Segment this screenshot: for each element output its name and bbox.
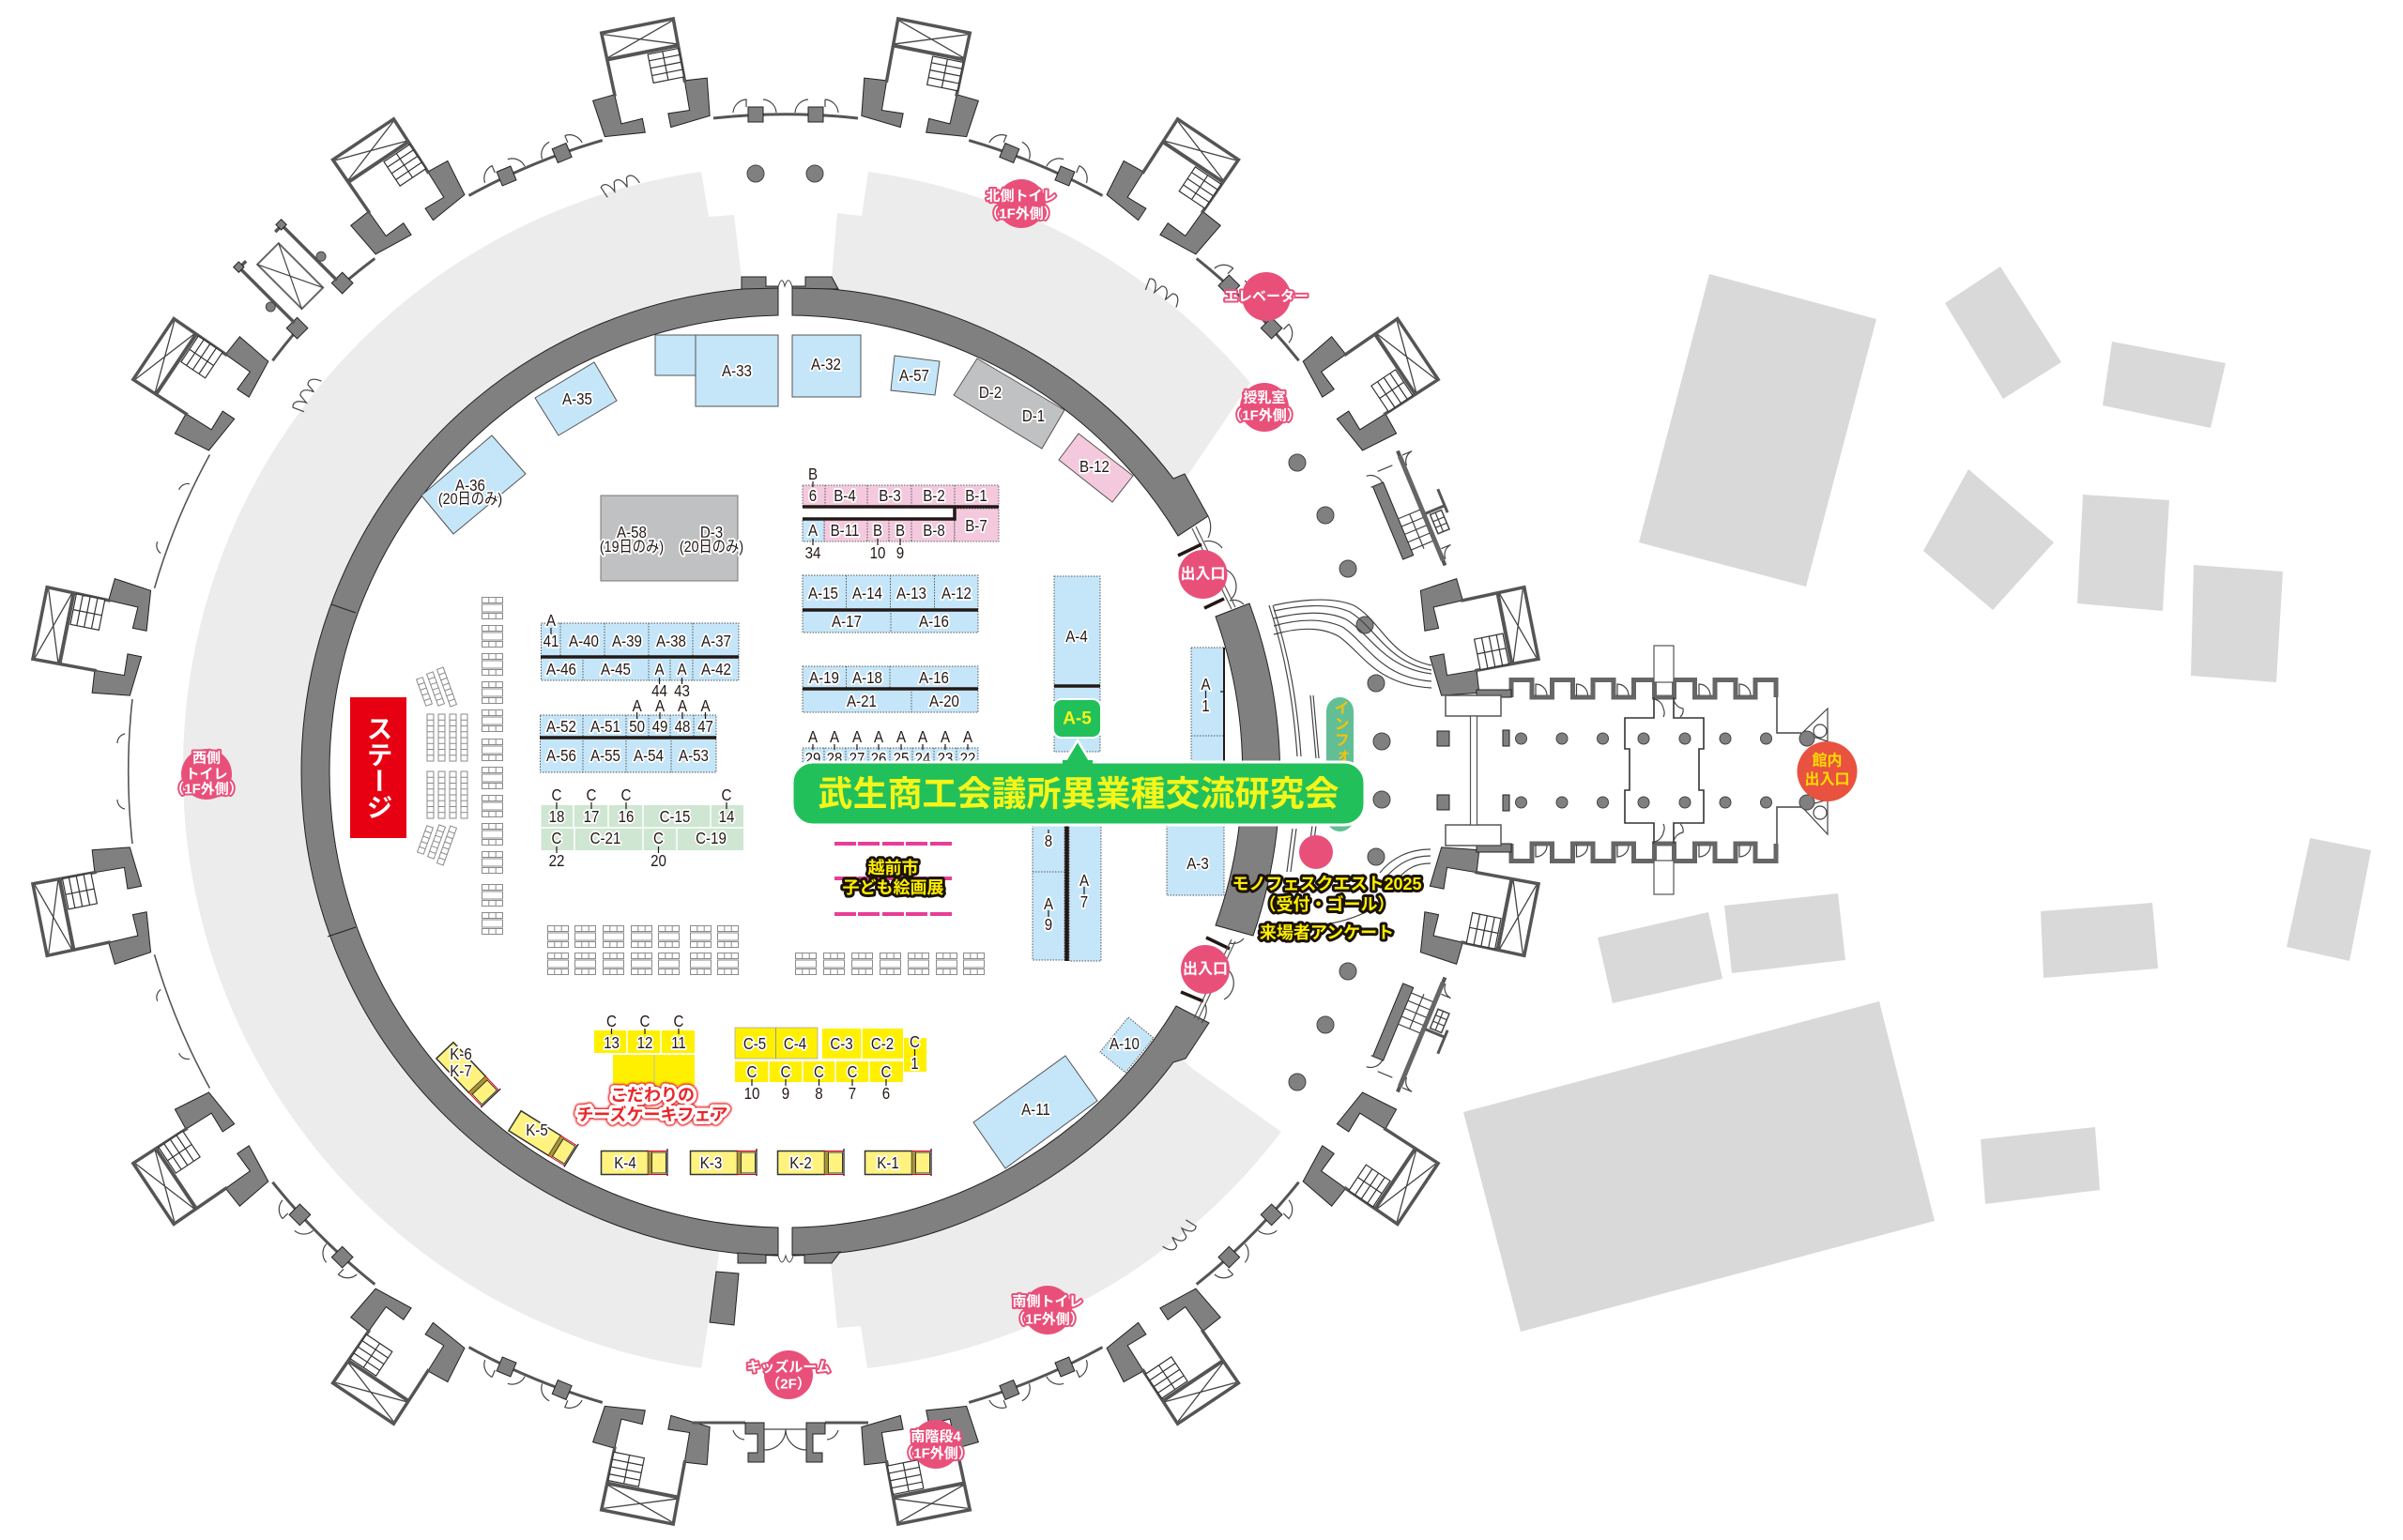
booths A-1 A-3: 1 (1202, 696, 1210, 715)
badge: 西側トイレ: トイレ (185, 766, 228, 783)
booths C-14 to C-22: 17 (584, 807, 599, 826)
badge: 南階段4: 南階段4 (911, 1428, 961, 1445)
booths A-7 A-8 A-9: 7 (1080, 892, 1088, 911)
booths A-22 to A-29: A (852, 727, 863, 746)
booths B row: A (808, 521, 819, 540)
booths A-22 to A-29: A (874, 727, 884, 746)
booths B row: 9 (896, 543, 904, 562)
badge: 館内出入口 (1797, 741, 1857, 801)
booths A-12 to A-17: A-16 (919, 612, 949, 631)
booths A-7 A-8 A-9: 9 (1045, 915, 1052, 934)
badge: 出入口 north: 出入口 (1180, 565, 1226, 582)
booths C-14 to C-22: C-19 (696, 829, 727, 847)
booths C-1 to C-10: C-5 (743, 1034, 766, 1053)
perimeter stair towers (28, 14, 1543, 1529)
booths A-16 to A-21 (803, 666, 978, 712)
booths A-37 to A-46: 43 (674, 681, 690, 700)
booths C-1 to C-10: C-2 (871, 1034, 894, 1053)
booths C-1 to C-10: C (814, 1062, 824, 1081)
west lift box (207, 192, 376, 362)
audience chairs (417, 667, 467, 865)
こだわりのチーズケーキフェア label (576, 1086, 728, 1124)
perimeter booths north: B-12 (1079, 457, 1110, 476)
booths C-14 to C-22: 18 (549, 807, 564, 826)
badge: 南側トイレ (1011, 1286, 1084, 1334)
booths C-14 to C-22: C (653, 829, 664, 847)
booth A-4: A-4 (1065, 627, 1088, 646)
kitchen cars K-1 to K-7: K-3 (700, 1153, 722, 1172)
badge: キッズルーム: キッズルーム (746, 1359, 831, 1376)
booth A-58 D-3: D-3 (700, 523, 723, 541)
booths A-22 to A-29: 26 (871, 749, 886, 768)
booths A-12 to A-17: A-12 (941, 584, 972, 602)
booths A-37 to A-46: A-37 (701, 632, 731, 650)
booths A-47 to A-56 (540, 696, 716, 772)
booths C-1 to C-10: C-4 (784, 1034, 806, 1053)
booths C-14 to C-22: 14 (719, 807, 734, 826)
badge: キッズルーム: （2F） (766, 1376, 811, 1393)
perimeter wall segments with doors (117, 99, 1312, 1420)
curved entrance steps (1269, 600, 1431, 926)
booths C-1 to C-10: C (848, 1062, 857, 1081)
booths C-14 to C-22: C-15 (660, 807, 690, 826)
exhibition pink poles (834, 842, 952, 916)
door markers in the concourse (290, 174, 1199, 1254)
south doors (692, 1423, 868, 1462)
booths A-22 to A-29: 29 (805, 749, 820, 768)
badge: 西側トイレ: 西側 (192, 751, 221, 766)
booths B row: B-2 (923, 486, 945, 505)
perimeter booths north: D-2 (979, 383, 1002, 402)
booths A-47 to A-56: A (655, 696, 666, 715)
booths A-37 to A-46: A-46 (546, 660, 576, 679)
kitchen cars K-1 to K-7: K-1 (877, 1153, 899, 1172)
booth A-4 (1054, 576, 1100, 752)
booths C-14 to C-22: 20 (650, 851, 666, 870)
booths A-37 to A-46: A-40 (569, 632, 599, 650)
badge: 授乳室 (1228, 383, 1301, 432)
booths B row: B-1 (965, 486, 987, 505)
booths A-37 to A-46 (541, 611, 739, 700)
booth A-58 D-3 (600, 496, 743, 581)
kitchen cars K-1 to K-7 (436, 1041, 931, 1176)
booths C-1 to C-10: C (910, 1032, 920, 1051)
booths A-22 to A-29: 23 (938, 749, 953, 768)
booths B row: B-7 (965, 516, 987, 535)
booths C-1 to C-10: C (747, 1062, 757, 1081)
booths C-14 to C-22: 22 (549, 851, 564, 870)
booths A-47 to A-56: 49 (652, 717, 667, 736)
badge: 南階段4 (899, 1420, 972, 1469)
badge: A-5: A-5 (1063, 709, 1092, 728)
badge: 授乳室: （1F外側） (1228, 407, 1301, 424)
kitchen cars K-1 to K-7: K-4 (614, 1153, 636, 1172)
perimeter booths north: A-35 (562, 389, 592, 408)
booths B row: B-11 (831, 521, 859, 540)
booths B row: B-4 (834, 486, 856, 505)
booths A-22 to A-29: 27 (849, 749, 865, 768)
perimeter booths north: A-36 (455, 476, 485, 495)
entrance hall (1437, 646, 1828, 894)
booths A-37 to A-46: A-42 (701, 660, 731, 679)
callout: 武生商工会議所異業種交流研究会 with pointer (792, 740, 1365, 825)
booths C-14 to C-22: 16 (619, 807, 634, 826)
booths A-47 to A-56: A-53 (679, 746, 709, 765)
booths C-11 to C-13: 11 (671, 1033, 686, 1052)
booths A-37 to A-46: A-39 (612, 632, 642, 650)
booths A-37 to A-46: A-38 (656, 632, 686, 650)
booths A-22 to A-29: 25 (894, 749, 909, 768)
booths C-14 to C-22: C (722, 785, 731, 804)
booths A-47 to A-56: A-54 (634, 746, 664, 765)
booths C-1 to C-10: C (881, 1062, 891, 1081)
booths A-22 to A-29: 22 (960, 749, 975, 768)
badge: 出入口 south (1181, 945, 1230, 994)
booths A-37 to A-46: A (655, 660, 665, 679)
booths A-10 A-11: A-10 (1110, 1034, 1140, 1053)
booths A-22 to A-29 (803, 727, 978, 768)
booths A-12 to A-17: A-14 (852, 584, 882, 602)
booths A-47 to A-56: 48 (675, 717, 690, 736)
booths A-22 to A-29: A (808, 727, 819, 746)
booths A-22 to A-29: 24 (915, 749, 930, 768)
booths B row: B (895, 521, 905, 540)
booths C-1 to C-10: C-3 (830, 1034, 853, 1053)
booths A-47 to A-56: A-56 (546, 746, 576, 765)
モノフェスクエスト2025 label (1232, 875, 1422, 942)
booth A-58 D-3: (20日のみ) (680, 539, 743, 556)
booths A-47 to A-56: A (633, 696, 643, 715)
booths C-1 to C-10: 6 (882, 1084, 890, 1103)
booths A-1 A-3: A-3 (1186, 854, 1209, 873)
booths C-1 to C-10: 10 (744, 1084, 759, 1103)
booths A-37 to A-46: 41 (543, 632, 559, 650)
badge: 南階段4: （1F外側） (899, 1445, 972, 1462)
stage (350, 697, 406, 838)
booths A-7 A-8 A-9: 8 (1045, 831, 1052, 850)
booths A-47 to A-56: A (678, 696, 688, 715)
kitchen cars K-1 to K-7: K-6 (450, 1044, 472, 1063)
booths A-22 to A-29: A (963, 727, 973, 746)
perimeter booths north: A-32 (811, 355, 841, 374)
booths C-1 to C-10: C (781, 1062, 790, 1081)
booths B row: 6 (809, 486, 817, 505)
booths C-14 to C-22: C (552, 785, 561, 804)
booths C-11 to C-13: 12 (637, 1033, 652, 1052)
booths B row: B-3 (879, 486, 901, 505)
booths B row: 10 (870, 543, 885, 562)
booths C-14 to C-22 (541, 785, 743, 870)
booths A-1 A-3 (1167, 648, 1224, 895)
kitchen cars K-1 to K-7: K-5 (526, 1121, 548, 1139)
badge: エレベーター: エレベーター (1224, 289, 1309, 304)
perimeter booths north (421, 335, 1133, 534)
booths A-16 to A-21: A-21 (847, 692, 877, 710)
badge: 北側トイレ: 北側トイレ (986, 188, 1057, 205)
booths A-22 to A-29: A (918, 727, 928, 746)
information counter: インフォ (1331, 700, 1348, 764)
booths A-47 to A-56: A-51 (590, 717, 620, 736)
booths A-16 to A-21: A-18 (852, 668, 882, 687)
booths B row (803, 465, 999, 562)
booths C-1 to C-10: 1 (911, 1054, 919, 1073)
こだわりのチーズケーキフェア label: チーズケーキフェア (576, 1105, 728, 1124)
越前市 子ども絵画展 label: 子ども絵画展 (843, 878, 944, 897)
booths C-14 to C-22: C (621, 785, 631, 804)
badge: 西側トイレ (170, 749, 243, 800)
perimeter booths north: (20日のみ) (438, 491, 502, 508)
booths C-14 to C-22: C-21 (590, 829, 620, 847)
booths A-47 to A-56: 47 (697, 717, 713, 736)
badge: 館内出入口: 出入口 (1804, 771, 1850, 788)
booths A-12 to A-17: A-15 (808, 584, 838, 602)
booths A-22 to A-29: 28 (827, 749, 842, 768)
booths A-12 to A-17: A-13 (896, 584, 926, 602)
booths A-7 A-8 A-9: A (1079, 871, 1090, 890)
booths A-16 to A-21: A-20 (929, 692, 959, 710)
booths A-12 to A-17: A-17 (832, 612, 862, 631)
perimeter booths north: A-33 (722, 361, 752, 380)
badge: エレベーター (1224, 272, 1309, 321)
kitchen cars K-1 to K-7: K-7 (450, 1061, 472, 1080)
越前市 子ども絵画展 label (843, 859, 944, 897)
booths A-22 to A-29: A (941, 727, 951, 746)
booths A-47 to A-56: A-55 (590, 746, 620, 765)
badge: 南側トイレ: 南側トイレ (1012, 1293, 1083, 1310)
booths C-11 to C-13: C (674, 1012, 683, 1030)
booths C-1 to C-10: 8 (815, 1084, 823, 1103)
lobby columns (747, 165, 1390, 1090)
booths A-37 to A-46: 44 (651, 681, 667, 700)
information counter (1326, 697, 1354, 831)
越前市 子ども絵画展 label: 越前市 (867, 859, 918, 877)
badge: 北側トイレ: （1F外側） (985, 205, 1058, 221)
hall side doors (1178, 516, 1244, 1023)
booths C-11 to C-13 (594, 1012, 695, 1086)
badge: 授乳室: 授乳室 (1243, 390, 1286, 405)
badge: 北側トイレ (985, 179, 1058, 228)
callout: 武生商工会議所異業種交流研究会 with pointer: 武生商工会議所異業種交流研究会 (819, 775, 1339, 813)
reception dot (1299, 835, 1333, 869)
perimeter booths north: A-57 (899, 366, 929, 385)
モノフェスクエスト2025 label: モノフェスクエスト2025 (1232, 875, 1422, 893)
booths A-12 to A-17 (803, 575, 978, 633)
badge: A-5 (1053, 699, 1101, 738)
table sets (482, 597, 984, 974)
badge: 出入口 south: 出入口 (1183, 961, 1228, 978)
badge: 西側トイレ: （1F外側） (170, 781, 243, 798)
booths C-1 to C-10: 9 (782, 1084, 789, 1103)
light grey concourse ring (183, 172, 1281, 1368)
モノフェスクエスト2025 label: 来場者アンケート (1260, 923, 1394, 942)
stage: ステージ (364, 715, 392, 820)
kitchen cars K-1 to K-7: K-2 (789, 1153, 812, 1172)
booths A-22 to A-29: A (830, 727, 840, 746)
booths C-1 to C-10: 7 (849, 1084, 856, 1103)
perimeter booths north: D-1 (1022, 406, 1045, 425)
exhibition hall inner wall (301, 277, 1280, 1325)
booths C-14 to C-22: C (552, 829, 561, 847)
booths A-1 A-3: A (1202, 675, 1211, 694)
side stair blocks (1362, 442, 1466, 1101)
neighbouring buildings (1463, 267, 2371, 1332)
booths C-11 to C-13: C (640, 1012, 650, 1030)
booths C-11 to C-13: C (606, 1012, 617, 1030)
booths A-37 to A-46: A-45 (601, 660, 631, 679)
booths C-14 to C-22: C (587, 785, 596, 804)
booths A-7 A-8 A-9: A (1044, 894, 1054, 913)
booths B row: 34 (805, 543, 820, 562)
badge: 館内出入口: 館内 (1812, 753, 1843, 770)
booth A-58 D-3: (19日のみ) (600, 539, 664, 556)
booths B row: B-8 (923, 521, 945, 540)
booths C-1 to C-10 (735, 1028, 926, 1103)
badge: 出入口 north (1179, 550, 1228, 599)
booths C-11 to C-13: 13 (604, 1033, 620, 1052)
booth A-58 D-3: A-58 (617, 523, 647, 541)
こだわりのチーズケーキフェア label: こだわりの (610, 1086, 695, 1105)
booths A-10 A-11: A-11 (1021, 1100, 1050, 1119)
badge: 南側トイレ: （1F外側） (1011, 1310, 1084, 1327)
モノフェスクエスト2025 label: （受付・ゴール） (1260, 894, 1395, 914)
booths A-16 to A-21: A-19 (809, 668, 839, 687)
booths A-7 A-8 A-9 (1033, 816, 1101, 961)
booths A-37 to A-46: A (546, 611, 557, 630)
booths A-47 to A-56: A-52 (546, 717, 576, 736)
booths A-22 to A-29: A (896, 727, 907, 746)
booths B row: B (808, 465, 818, 483)
booths A-16 to A-21: A-16 (919, 668, 949, 687)
booths A-10 A-11 (973, 1017, 1154, 1168)
badge: キッズルーム (746, 1350, 831, 1399)
booths A-37 to A-46: A (678, 660, 687, 679)
booths B row: B (873, 521, 882, 540)
booths A-47 to A-56: 50 (629, 717, 645, 736)
booths A-47 to A-56: A (701, 696, 711, 715)
